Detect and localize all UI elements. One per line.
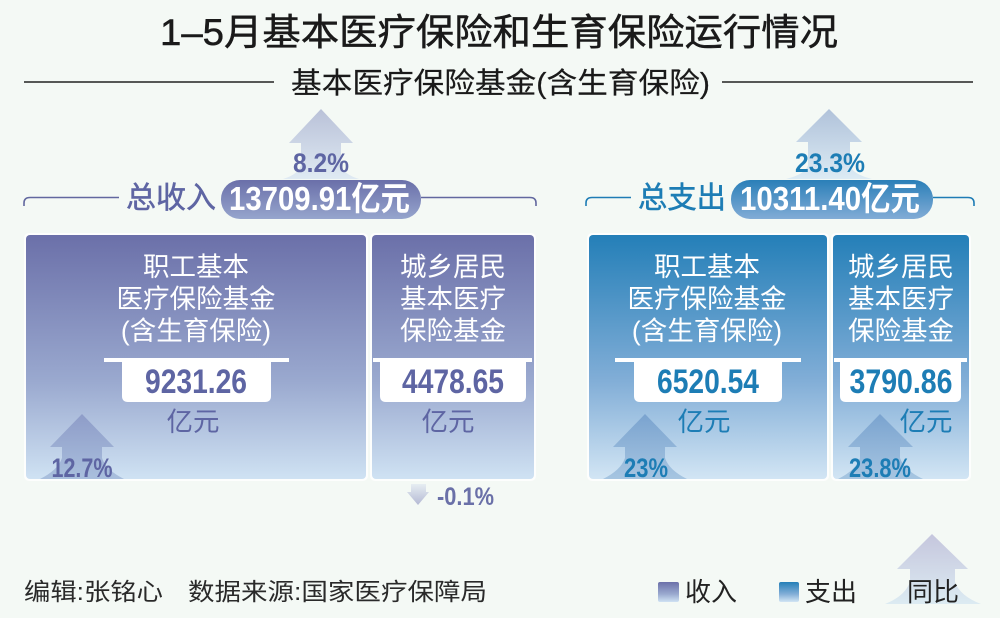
panel heading: 职工基本 [143, 252, 249, 282]
panel heading [116, 252, 276, 346]
legend: income [658, 577, 737, 607]
value box: 4478.65 [402, 363, 504, 401]
panel heading: (含生育保险) [121, 316, 271, 346]
panel: resident fund expenditure [831, 233, 971, 483]
panel heading [628, 252, 786, 346]
expenditure total pill: 10311.40亿元 [740, 180, 920, 217]
panel heading: 职工基本 [654, 252, 760, 282]
legend: expenditure [779, 577, 857, 607]
expenditure label: 总支出 [638, 182, 726, 215]
title: 1–5月基本医疗保险和生育保险运行情况 [160, 12, 838, 53]
arrow: 23% [603, 414, 687, 483]
panel: resident fund income [370, 233, 536, 481]
arrow: expenditure up 23.3%: 23.3% [795, 148, 865, 178]
legend: income: 收入 [685, 577, 737, 607]
arrow: income up 8.2% [283, 109, 359, 179]
credits [24, 579, 487, 606]
expenditure bracket line [586, 198, 974, 206]
panel heading: 保险基金 [400, 316, 506, 346]
income total pill: 13709.91亿元 [229, 180, 410, 217]
unit: 亿元 [678, 407, 730, 437]
panel: total income [24, 109, 536, 219]
arrow: 23%: 23% [624, 453, 668, 483]
panel: total expenditure [586, 109, 974, 219]
panel heading [400, 252, 506, 346]
arrow: 12.7%: 12.7% [52, 453, 112, 483]
arrow: down -0.1% [407, 483, 494, 511]
unit: 亿元 [422, 407, 474, 437]
credits: 编辑:张铭心 [24, 579, 163, 606]
value box [615, 358, 801, 402]
arrow: 23.8%: 23.8% [849, 453, 911, 483]
arrow: income up 8.2%: 8.2% [293, 148, 349, 178]
value box: 6520.54 [657, 363, 759, 401]
arrow: down -0.1%: -0.1% [437, 483, 494, 511]
arrow: expenditure up 23.3% [786, 109, 872, 179]
panel heading: 保险基金 [848, 316, 954, 346]
value box [373, 358, 532, 402]
income label: 总收入 [126, 182, 216, 215]
panel heading: 城乡居民 [400, 252, 506, 282]
panel heading: 基本医疗 [848, 284, 954, 314]
unit: 亿元 [900, 407, 952, 437]
legend: year on year [885, 534, 981, 607]
value box: 3790.86 [850, 363, 952, 401]
arrow: 23.8% [838, 414, 923, 483]
panel heading: 城乡居民 [848, 252, 954, 282]
panel heading: 医疗保险基金 [628, 284, 786, 314]
legend: expenditure: 支出 [805, 577, 857, 607]
value box: 9231.26 [145, 363, 247, 401]
income bracket line [24, 198, 536, 206]
panel: employee fund expenditure [587, 233, 829, 483]
credits: 数据来源:国家医疗保障局 [188, 579, 487, 606]
arrow: 12.7% [40, 414, 124, 483]
panel heading: (含生育保险) [632, 316, 782, 346]
panel heading [848, 252, 954, 346]
unit: 亿元 [166, 407, 220, 437]
value box [104, 358, 289, 402]
panel heading: 医疗保险基金 [116, 284, 276, 314]
subtitle with rules: 基本医疗保险基金(含生育保险) [291, 67, 710, 100]
legend: year on year: 同比 [907, 577, 959, 607]
panel: employee fund income [24, 233, 368, 483]
panel heading: 基本医疗 [400, 284, 506, 314]
legend [658, 534, 981, 607]
